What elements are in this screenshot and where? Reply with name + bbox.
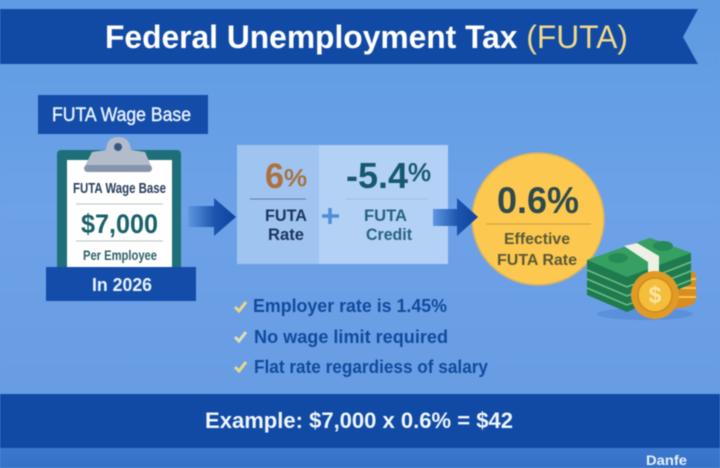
- clipboard heading: FUTA Wage Base: [73, 180, 166, 197]
- stacked coins: [672, 270, 696, 308]
- effective rate circle: 0.6%: [497, 180, 579, 221]
- per employee: Per Employee: [83, 247, 157, 263]
- wage base label: FUTA Wage Base: [52, 105, 191, 126]
- wage base label: [38, 95, 208, 134]
- year bar: [46, 267, 196, 301]
- source label: Danfe: [646, 452, 687, 468]
- item: wage limit: No wage limit required: [254, 326, 448, 347]
- panel: rates: [237, 145, 448, 264]
- panel: FUTA credit: %: [408, 159, 431, 187]
- effective rate circle: FUTA Rate: [497, 252, 577, 269]
- icon: clipboard clip: [84, 137, 152, 172]
- checklist: [235, 295, 489, 377]
- plus sign: [322, 208, 339, 224]
- panel: FUTA rate: [237, 145, 319, 264]
- clipboard: [57, 137, 181, 275]
- effective rate circle: [472, 153, 604, 285]
- icon: cash stack and coins: $: [649, 282, 662, 308]
- icon: cash stack and coins: [587, 238, 696, 320]
- bills: [587, 238, 691, 312]
- effective rate circle: Effective: [504, 231, 570, 248]
- example bar: [0, 394, 720, 448]
- panel: FUTA credit: FUTA: [364, 206, 407, 225]
- amount: $7,000: [81, 209, 158, 239]
- coin: [631, 271, 679, 319]
- panel: FUTA credit: [319, 145, 448, 264]
- item: employer rate: Employer rate is 1.45%: [253, 295, 447, 316]
- panel: FUTA credit: Credit: [366, 225, 412, 244]
- panel: FUTA rate: FUTA: [265, 206, 307, 225]
- title: Federal Unemployment Tax (FUTA): [105, 19, 628, 55]
- panel: FUTA rate: Rate: [268, 225, 304, 244]
- panel: FUTA credit: -5.4: [346, 155, 408, 196]
- year bar: In 2026: [92, 275, 152, 295]
- clipboard paper: [67, 160, 172, 272]
- title banner: [0, 9, 698, 64]
- arrow: rates to effective rate: [433, 198, 478, 236]
- item: flat rate: Flat rate regardiess of salary: [254, 356, 489, 377]
- arrow: wage base to rates: [188, 198, 236, 236]
- example bar: Example: $7,000 x 0.6% = $42: [205, 408, 513, 433]
- panel: FUTA rate: %: [284, 165, 307, 192]
- panel: FUTA rate: 6: [265, 157, 284, 196]
